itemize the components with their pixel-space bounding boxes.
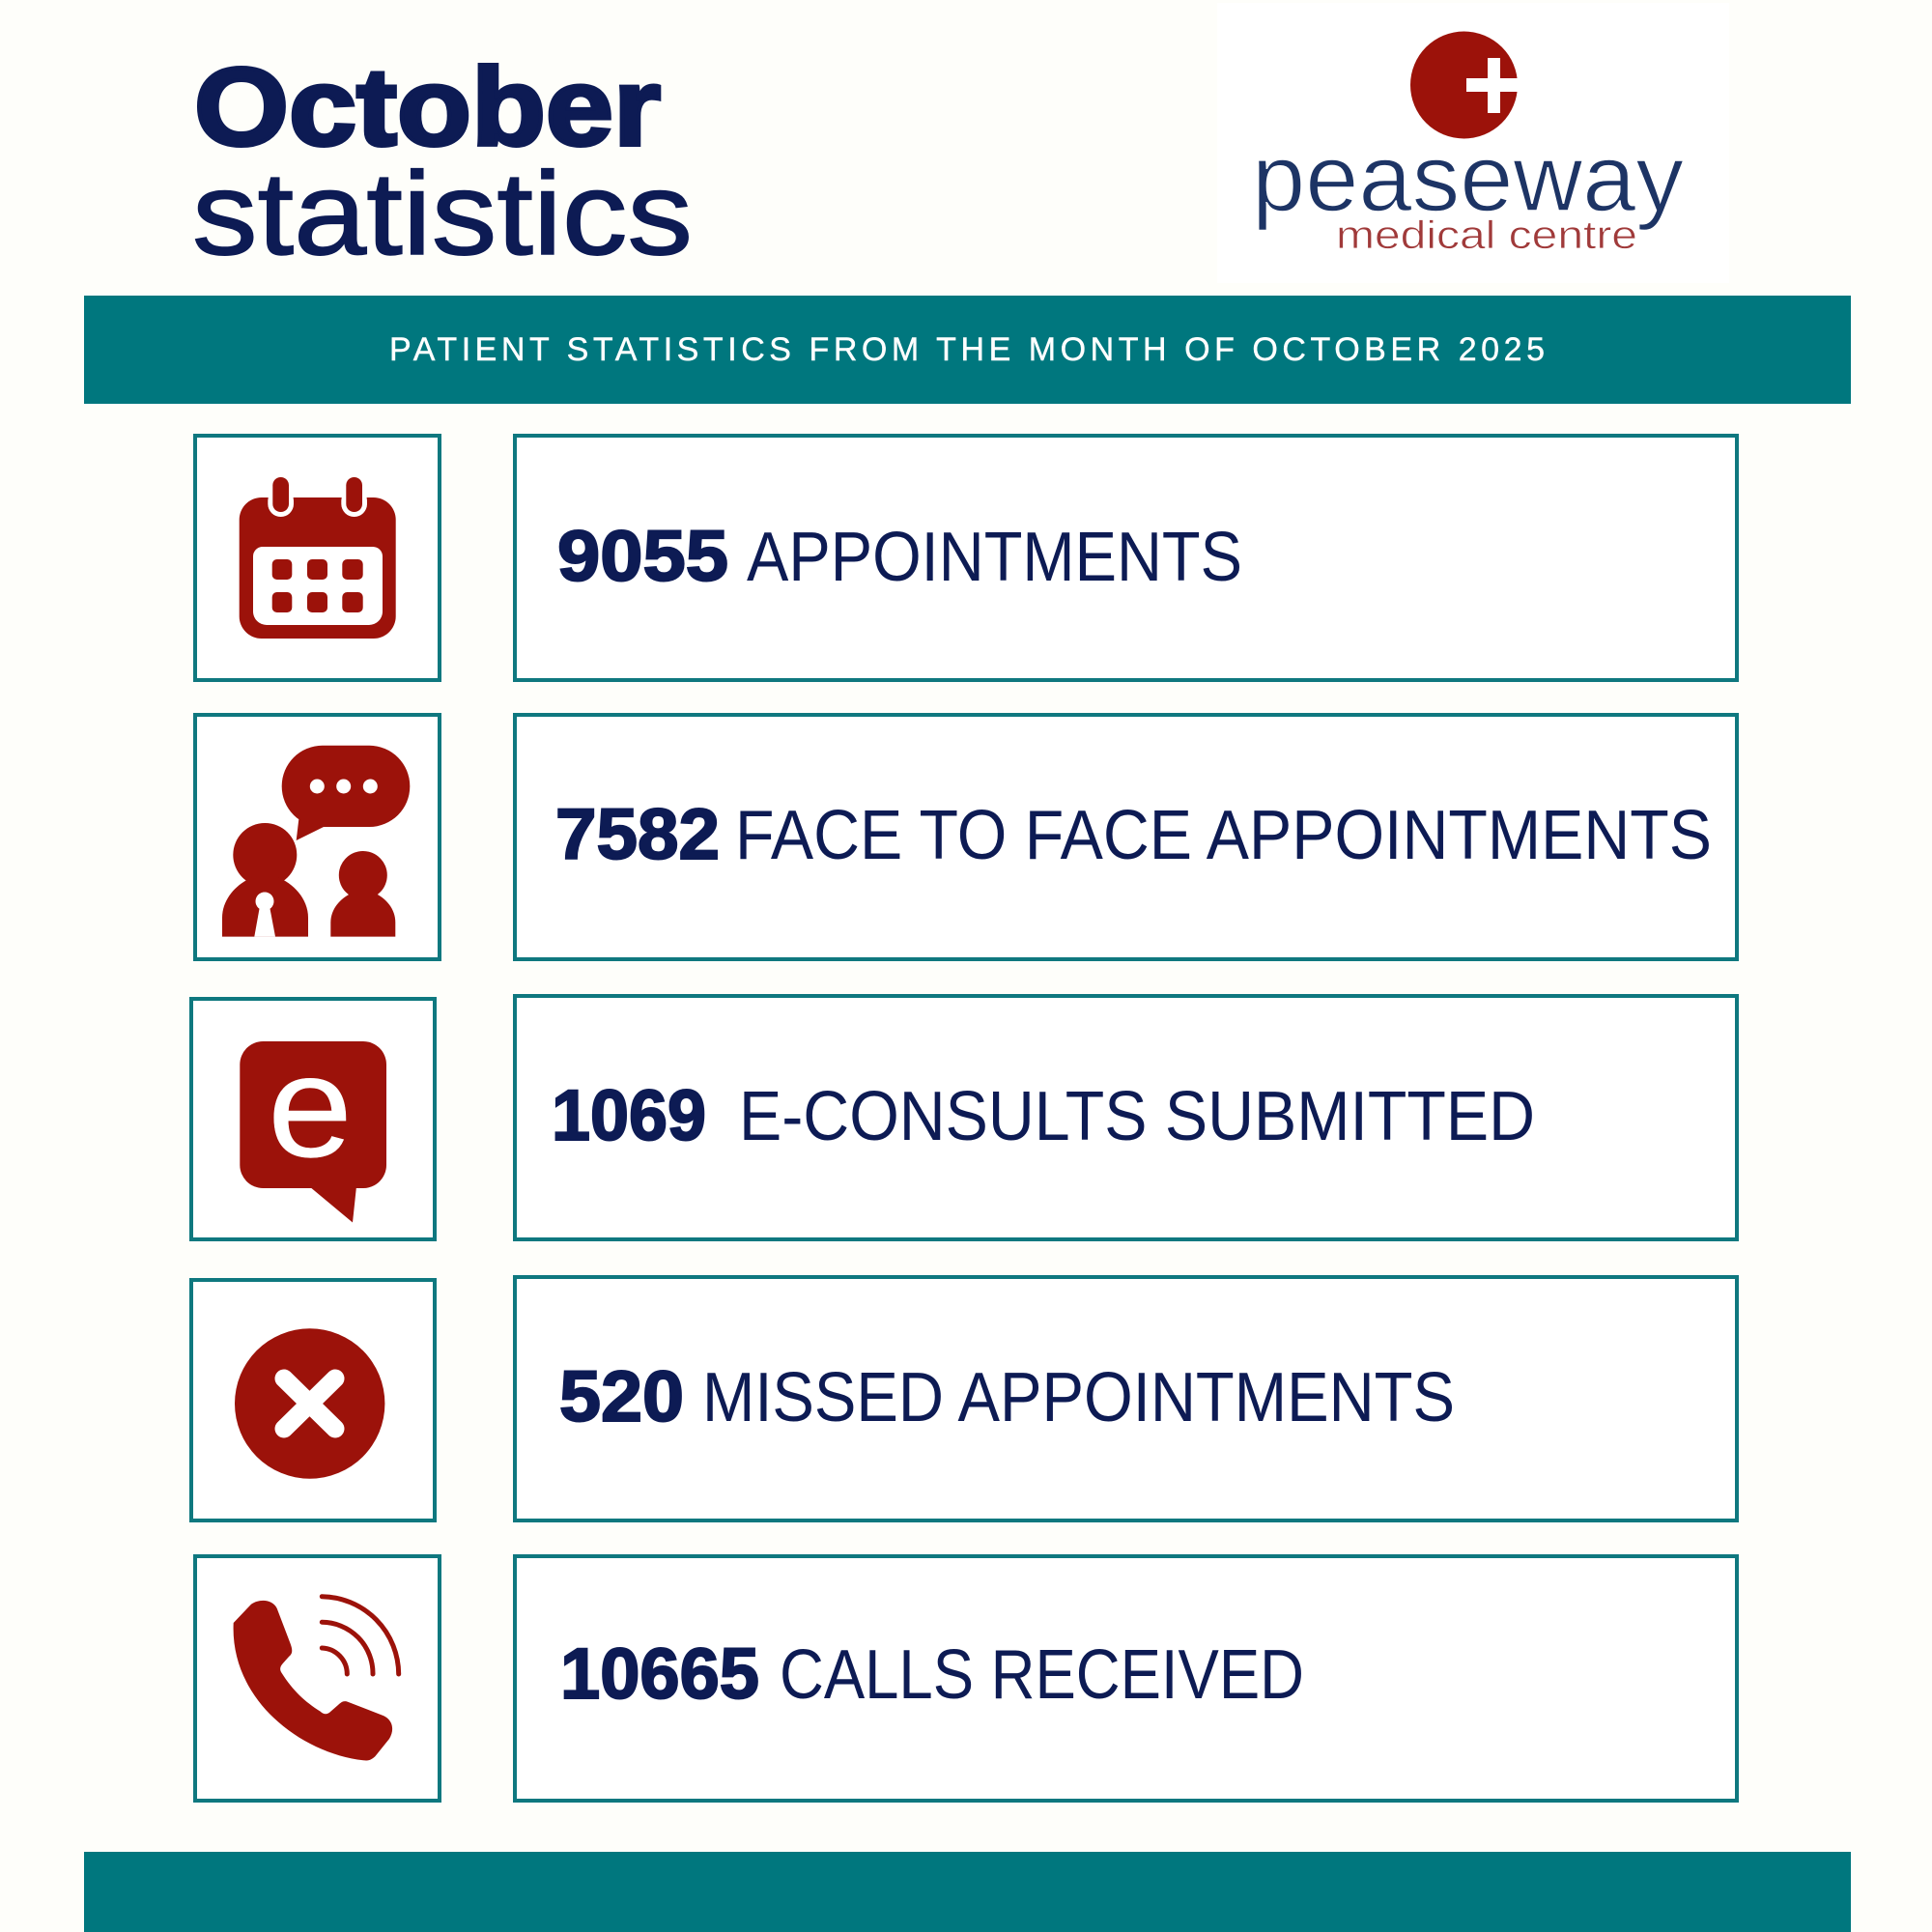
logo wordmark: peaseway — [1252, 125, 1684, 231]
stat box — [515, 436, 1737, 680]
stat box — [515, 996, 1737, 1239]
stat label: FACE TO FACE APPOINTMENTS — [735, 797, 1712, 874]
stat label: E-CONSULTS SUBMITTED — [739, 1078, 1535, 1155]
stat value: 9055 — [557, 516, 728, 596]
icon: cross in circle — [191, 1280, 435, 1520]
stat value: 10665 — [560, 1634, 759, 1714]
panel: appointments — [195, 436, 1737, 680]
panel: e-consults submitted — [191, 996, 1737, 1239]
icon: two people talking — [195, 715, 440, 959]
icon: telephone with signal — [195, 1556, 440, 1801]
stat value: 1069 — [552, 1075, 706, 1155]
stat label: APPOINTMENTS — [747, 519, 1242, 596]
panel: missed appointments — [191, 1277, 1737, 1520]
stat value: 520 — [559, 1356, 684, 1436]
banner text: PATIENT STATISTICS FROM THE MONTH OF OCTOBER 2025 — [389, 331, 1545, 368]
stat box — [515, 1556, 1737, 1801]
letter e: e — [268, 1025, 353, 1187]
stat label: MISSED APPOINTMENTS — [702, 1359, 1455, 1436]
banner: patient statistics — [84, 296, 1851, 404]
logo mark: red circle with cross — [1410, 31, 1518, 139]
panel: face to face appointments — [195, 715, 1737, 959]
stat box — [515, 1277, 1737, 1520]
title line: statistics: statistics — [192, 148, 693, 279]
icon: e-consult speech bubble — [191, 999, 435, 1239]
footer bar — [84, 1852, 1851, 1932]
stat value: 7582 — [555, 794, 720, 874]
logo subtitle: medical centre — [1336, 213, 1637, 257]
title line: October: October — [194, 46, 661, 169]
logo: peaseway medical centre — [1217, 3, 1729, 283]
panel: calls received — [195, 1556, 1737, 1801]
title — [192, 46, 693, 279]
stat label: CALLS RECEIVED — [780, 1636, 1304, 1714]
icon: calendar — [195, 436, 440, 680]
stat box — [515, 715, 1737, 959]
